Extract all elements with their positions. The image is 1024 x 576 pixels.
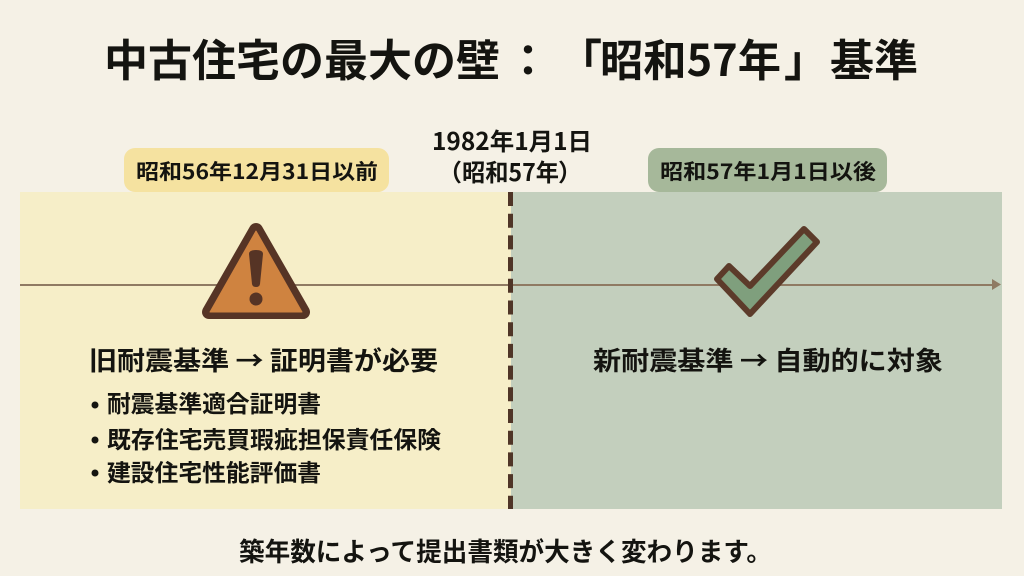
title: 「 [558,25,602,89]
title: 基準 [830,25,918,89]
label: before date [124,148,389,192]
timeline arrow [20,279,1001,290]
required documents list: 耐震基準適合証明書 [107,385,321,419]
boundary date label: （ [438,153,462,188]
old panel heading: 旧耐震基準 → 証明書が必要 [89,341,438,378]
date divider [508,192,513,509]
title: 」 [784,25,828,89]
label: after date: 昭和57年1月1日以後 [660,156,876,186]
label: after date [648,148,887,192]
required documents list: 建設住宅性能評価書 [107,454,321,488]
title: ： [506,25,550,89]
label: before date: 昭和56年12月31日以前 [136,156,378,186]
new panel heading: 新耐震基準 → 自動的に対象 [593,341,943,378]
panel: old standard [20,192,511,509]
footer message: 築年数によって提出書類が大きく変わります。 [239,532,772,569]
boundary date label [432,122,592,188]
boundary date label: ） [558,153,582,188]
title: 昭和57年 [600,25,781,89]
title [104,25,918,89]
required documents list [92,385,442,488]
boundary date label: 1982年1月1日 [432,122,592,157]
boundary date label: 昭和57年 [462,153,559,188]
panel: new standard [511,192,1002,509]
icon: check mark [717,229,817,314]
icon: warning triangle [209,230,303,312]
title: 中古住宅の最大の壁 [104,25,500,89]
required documents list: 既存住宅売買瑕疵担保責任保険 [107,421,442,455]
